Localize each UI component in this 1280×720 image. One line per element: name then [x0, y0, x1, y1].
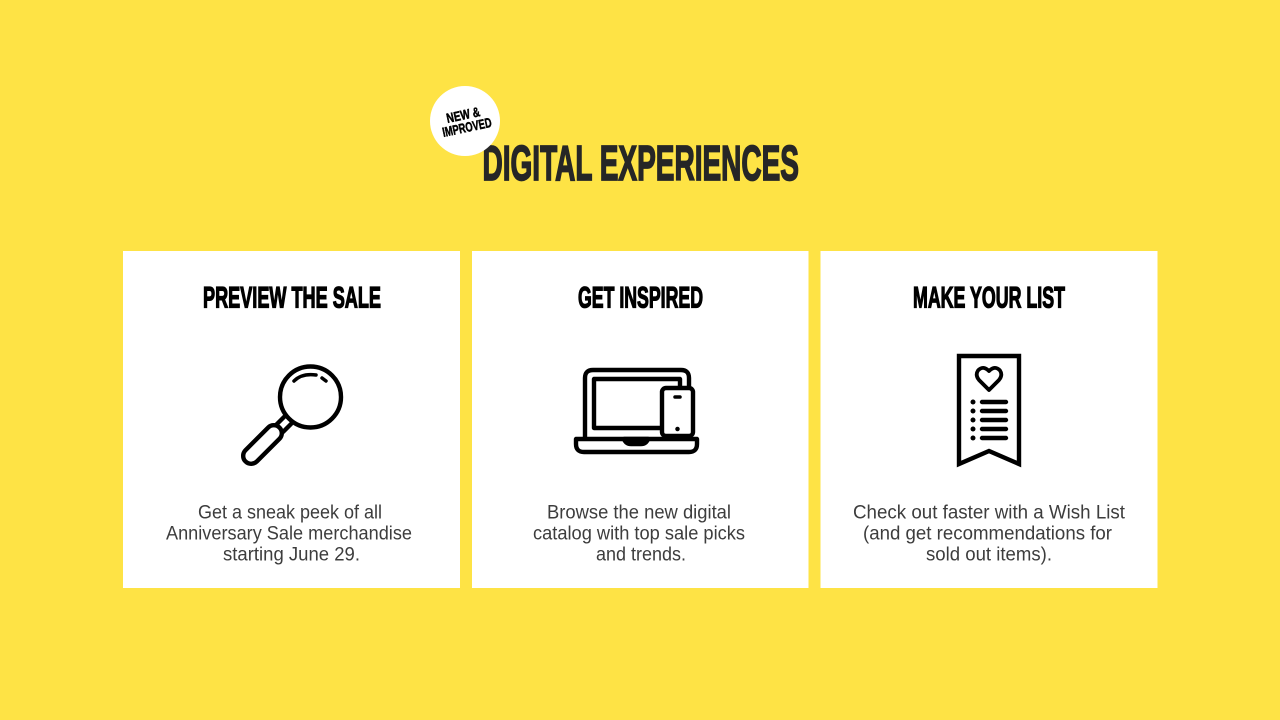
icon: magnifying glass	[240, 366, 341, 467]
title: DIGITAL EXPERIENCES	[482, 137, 799, 191]
text block: inspired description: and trends.	[596, 544, 686, 566]
text block: preview description: starting June 29.	[223, 544, 360, 566]
text block: preview description	[166, 502, 412, 566]
heading: get inspired: GET INSPIRED	[578, 282, 703, 314]
text block: list description: (and get recommendations for	[863, 524, 1113, 544]
heading: make your list: MAKE YOUR LIST	[913, 282, 1065, 314]
badge: new and improved: IMPROVED	[441, 115, 493, 140]
text block: list description: sold out items).	[926, 544, 1052, 566]
text block: list description: Check out faster with a Wish List	[853, 502, 1126, 524]
text block: preview description: Anniversary Sale merchandise	[166, 524, 412, 544]
heading: preview the sale: PREVIEW THE SALE	[203, 282, 381, 314]
badge: new and improved	[430, 86, 500, 156]
icon: wish list ribbon	[959, 356, 1019, 464]
icon: laptop and phone	[576, 370, 697, 452]
badge: new and improved: NEW &	[445, 104, 482, 126]
panel: get inspired	[472, 251, 808, 588]
text block: inspired description: catalog with top sale picks	[533, 524, 745, 544]
text block: preview description: Get a sneak peek of all	[198, 502, 382, 524]
panel: preview the sale	[123, 251, 460, 588]
text block: list description	[853, 502, 1126, 566]
panel: make your list	[820, 251, 1158, 588]
text block: inspired description	[533, 502, 745, 566]
text block: inspired description: Browse the new digital	[547, 502, 731, 524]
